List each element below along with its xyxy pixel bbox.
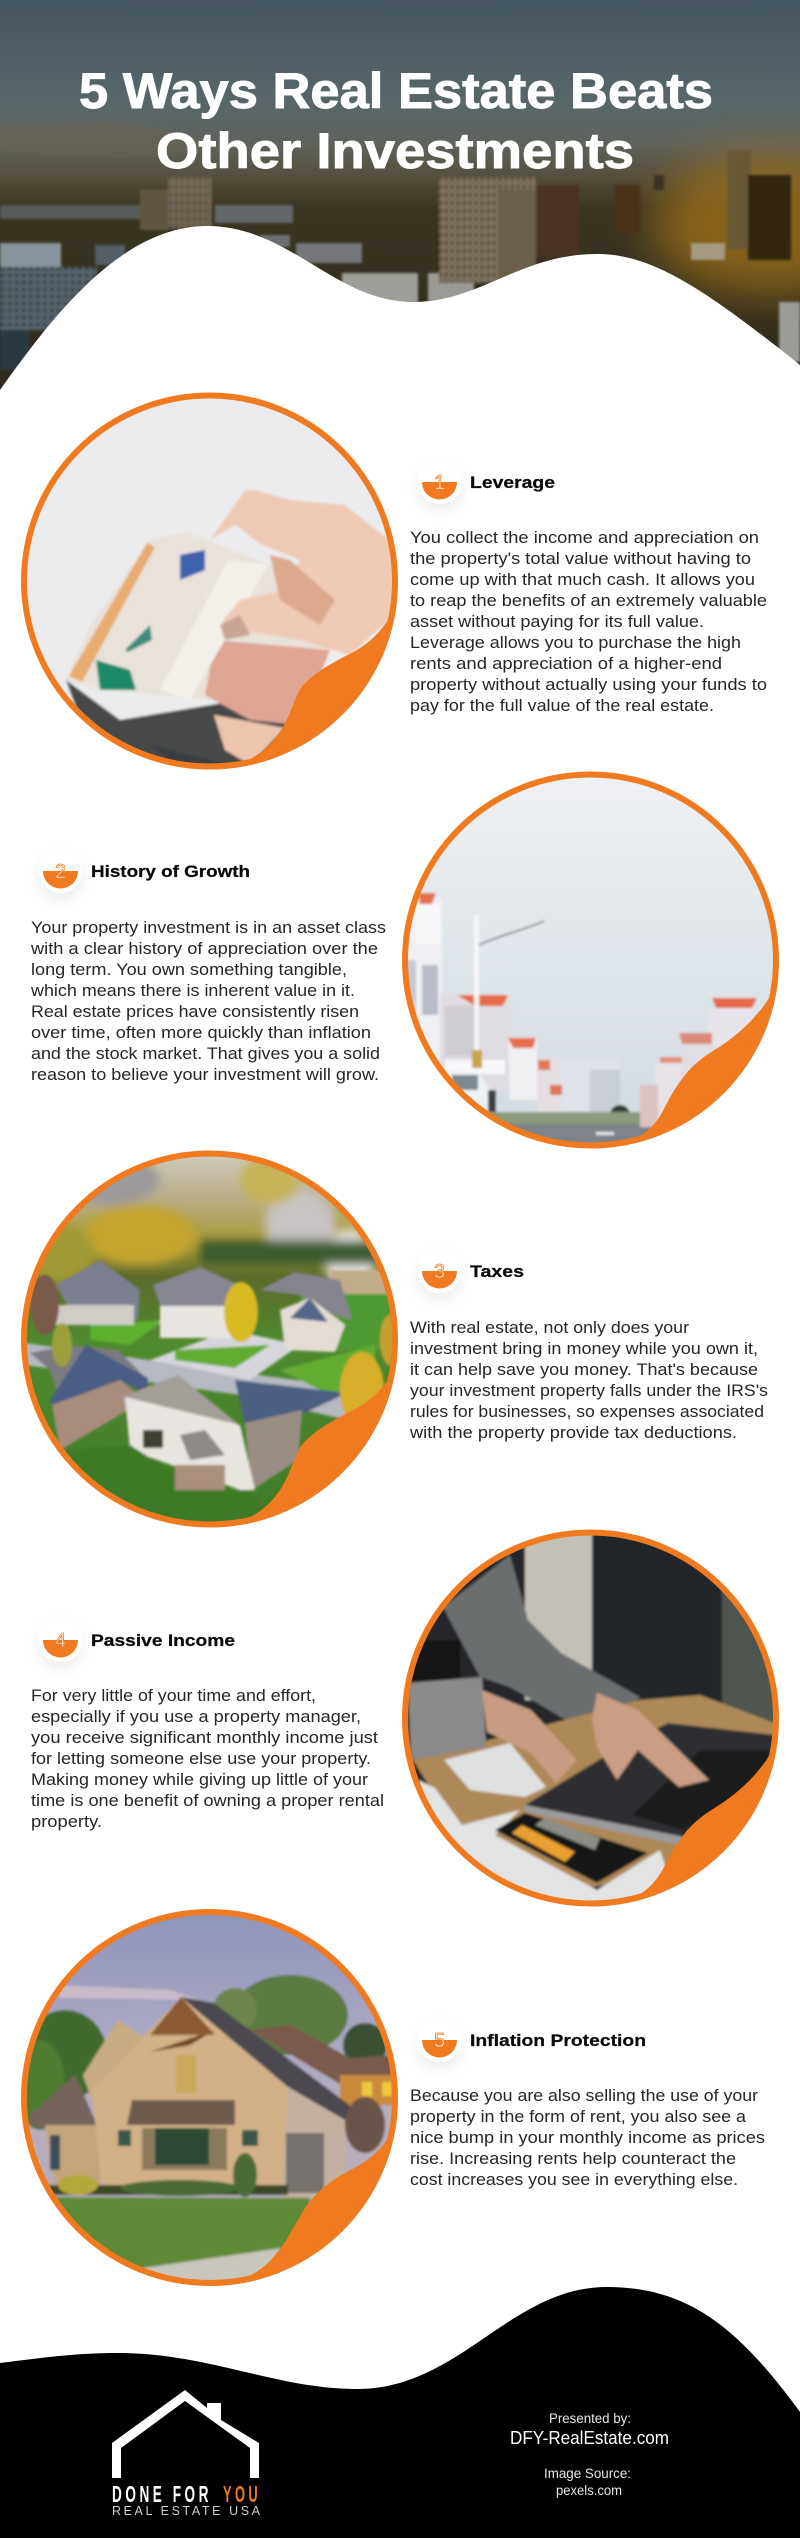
- body text: Your property investment is in an asset class: [31, 919, 386, 937]
- icon: number 2 bowl: 2: [55, 861, 66, 883]
- heading: History of Growth: [91, 862, 250, 881]
- body text: which means there is inherent value in it.: [30, 982, 355, 1000]
- header photo: city skyline at sunrise: [0, 0, 800, 400]
- icon: number 4 bowl: 4: [55, 1630, 66, 1652]
- body text: reason to believe your investment will grow.: [31, 1066, 379, 1084]
- icon: number 2 bowl: [38, 849, 82, 893]
- body text: with the property provide tax deductions.: [409, 1424, 737, 1442]
- body text: cost increases you see in everything else.: [410, 2171, 738, 2189]
- body text: For very little of your time and effort,: [31, 1687, 316, 1705]
- footer black wave: [0, 2287, 800, 2538]
- orange ring: [24, 1912, 395, 2283]
- body text: long term. You own something tangible,: [31, 961, 347, 979]
- body text: and the stock market. That gives you a solid: [31, 1045, 380, 1063]
- body text: you receive significant monthly income just: [31, 1729, 378, 1747]
- title: Other Investments: [156, 123, 634, 179]
- body text: [410, 529, 767, 715]
- logo wordmark: REAL ESTATE USA: [112, 2504, 261, 2518]
- panel: photo of suburban houses: [20, 1150, 400, 1535]
- body text: You collect the income and appreciation on: [410, 529, 759, 547]
- body text: [30, 919, 386, 1084]
- body text: come up with that much cash. It allows you: [410, 571, 755, 589]
- icon: number 5 bowl: 5: [434, 2030, 445, 2052]
- decorative orange corner swoosh: [210, 2112, 398, 2286]
- panel: photo of laptop and calculator: [400, 1525, 785, 1915]
- icon: number 3 bowl: [418, 1249, 462, 1293]
- body text: pay for the full value of the real estate.: [410, 697, 714, 715]
- heading: Passive Income: [91, 1631, 235, 1650]
- body text: property without actually using your funds to: [410, 676, 767, 694]
- body text: especially if you use a property manager,: [31, 1708, 361, 1726]
- footer credits: pexels.com: [556, 2483, 622, 2498]
- body text: asset without paying for its full value.: [410, 613, 704, 631]
- body text: Leverage allows you to purchase the high: [410, 634, 741, 652]
- heading: Leverage: [470, 473, 555, 492]
- body text: rents and appreciation of a higher-end: [410, 655, 722, 673]
- decorative orange corner swoosh: [210, 596, 398, 770]
- body text: it can help save you money. That's because: [410, 1361, 758, 1379]
- footer credits: Image Source:: [544, 2466, 631, 2481]
- panel: text 2 history of growth: [30, 849, 386, 1084]
- body text: [409, 1319, 768, 1442]
- body text: over time, often more quickly than inflation: [31, 1024, 371, 1042]
- body text: to reap the benefits of an extremely valuable: [410, 592, 767, 610]
- orange ring: [405, 774, 776, 1146]
- body text: property.: [31, 1813, 102, 1831]
- decorative orange corner swoosh: [590, 975, 778, 1148]
- body text: with a clear history of appreciation over the: [30, 940, 378, 958]
- body text: Because you are also selling the use of your: [410, 2087, 759, 2105]
- icon: number 1 bowl: [418, 460, 462, 504]
- body text: your investment property falls under the IRS's: [410, 1382, 768, 1400]
- logo: done for you real estate: [112, 2390, 261, 2518]
- panel: photo of white houses street: [400, 770, 785, 1156]
- body text: [31, 1687, 384, 1831]
- icon: number 1 bowl: 1: [434, 472, 445, 494]
- body text: With real estate, not only does your: [410, 1319, 690, 1337]
- panel: text 1 leverage: [410, 460, 767, 715]
- logo wordmark: [112, 2481, 261, 2518]
- body text: time is one benefit of owning a proper rental: [31, 1792, 384, 1810]
- body text: nice bump in your monthly income as prices: [410, 2129, 765, 2147]
- orange ring: [405, 1532, 776, 1904]
- title: [79, 63, 713, 179]
- heading: Taxes: [470, 1262, 524, 1281]
- icon: number 3 bowl: 3: [434, 1261, 445, 1283]
- body text: property in the form of rent, you also see a: [410, 2108, 747, 2126]
- decorative orange corner swoosh: [210, 1354, 398, 1528]
- heading: Inflation Protection: [470, 2031, 646, 2050]
- body text: the property's total value without having to: [410, 550, 751, 568]
- logo wordmark: DONE FOR: [112, 2481, 212, 2507]
- body text: investment bring in money while you own it,: [410, 1340, 758, 1358]
- panel: text 5 inflation protection: [410, 2018, 765, 2189]
- icon: number 5 bowl: [418, 2018, 462, 2062]
- panel: photo of hand with euro notes: [20, 390, 400, 775]
- body text: for letting someone else use your property.: [31, 1750, 371, 1768]
- panel: text 4 passive income: [31, 1618, 384, 1831]
- body text: rise. Increasing rents help counteract the: [410, 2150, 736, 2168]
- panel: photo of brick house: [15, 1905, 400, 2290]
- decorative orange corner swoosh: [590, 1733, 778, 1906]
- footer credits: Presented by:: [549, 2411, 631, 2426]
- panel: text 3 taxes: [409, 1249, 768, 1442]
- footer credits: DFY-RealEstate.com: [510, 2428, 669, 2448]
- orange ring: [24, 1154, 395, 1524]
- body text: rules for businesses, so expenses associated: [410, 1403, 764, 1421]
- icon: house outline: [112, 2390, 259, 2478]
- body text: [410, 2087, 765, 2189]
- title: 5 Ways Real Estate Beats: [79, 63, 713, 119]
- footer credits: [510, 2411, 669, 2498]
- orange ring: [24, 396, 395, 766]
- white wave below header: [0, 226, 800, 430]
- icon: number 4 bowl: [38, 1618, 82, 1662]
- body text: Real estate prices have consistently risen: [31, 1003, 359, 1021]
- body text: Making money while giving up little of your: [31, 1771, 369, 1789]
- logo wordmark: YOU: [223, 2481, 261, 2507]
